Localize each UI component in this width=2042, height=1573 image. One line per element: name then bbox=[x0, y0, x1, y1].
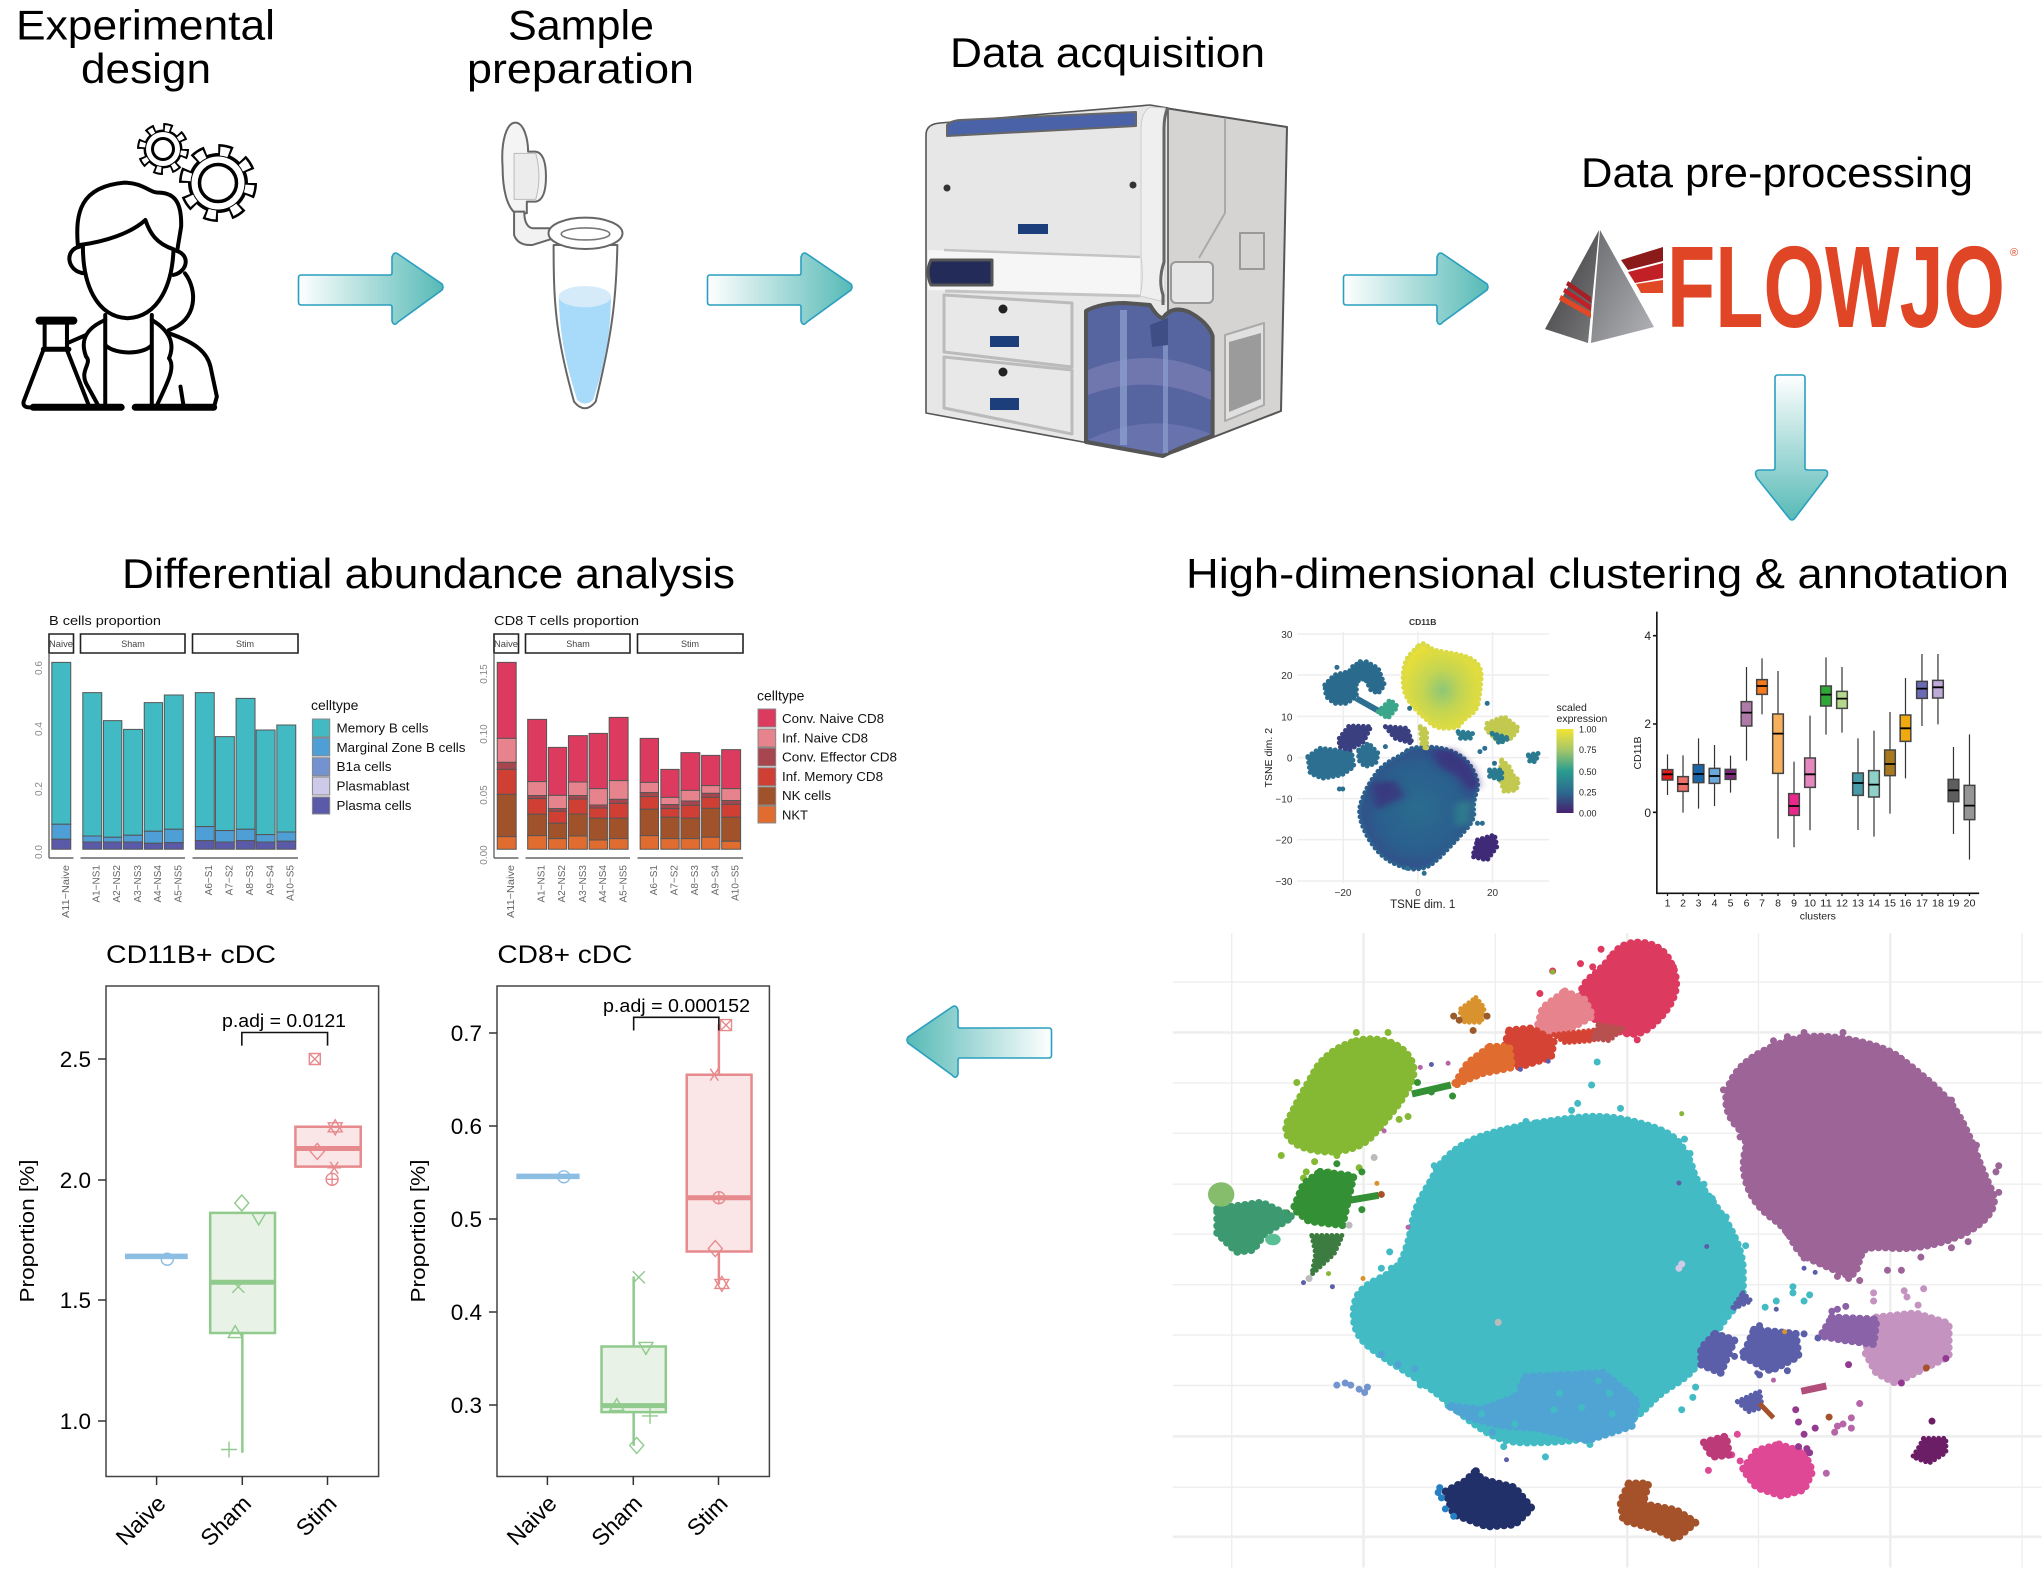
chart: CD11B feature tSNE: 20 bbox=[1281, 671, 1293, 682]
chart: CD11B feature tSNE: −20 bbox=[1275, 836, 1293, 846]
chart: CD11B boxplot by cluster: 5 bbox=[1728, 898, 1734, 910]
chart: CD11B+ cDC boxplot: 2.5 bbox=[60, 1047, 91, 1072]
chart: B cells proportion stacked bars: 0.6 bbox=[34, 661, 45, 675]
chart: CD11B+ cDC boxplot: Sham bbox=[195, 1490, 256, 1551]
chart: CD8 T cells proportion stacked bars: A8−S3 bbox=[690, 865, 701, 895]
chart: CD11B boxplot by cluster: 14 bbox=[1868, 898, 1880, 910]
chart: B cells proportion stacked bars: Plasmablast bbox=[336, 780, 410, 794]
chart: CD8+ cDC boxplot bbox=[407, 986, 769, 1551]
chart: CD11B boxplot by cluster: 18 bbox=[1932, 898, 1944, 910]
heading: CD11B+ cDC: CD11B+ cDC bbox=[106, 941, 276, 969]
chart: CD8+ cDC boxplot: 0.5 bbox=[451, 1207, 482, 1232]
heading: CD8+ cDC: CD8+ cDC bbox=[497, 941, 632, 969]
chart: CD11B boxplot by cluster: 12 bbox=[1836, 898, 1848, 910]
icon: flow cytometer instrument bbox=[926, 105, 1287, 456]
chart: CD8 T cells proportion stacked bars: NK cells bbox=[782, 789, 831, 803]
chart: B cells proportion stacked bars: A6−S1 bbox=[204, 865, 215, 895]
chart: B cells proportion stacked bars: Naive bbox=[49, 639, 73, 649]
chart: B cells proportion stacked bars: Stim bbox=[236, 639, 254, 649]
arrow: sample preparation to data acquisition bbox=[708, 253, 852, 324]
chart: B cells proportion stacked bars: B cells proportion bbox=[49, 613, 161, 628]
chart: CD11B boxplot by cluster: 7 bbox=[1759, 898, 1765, 910]
chart: CD11B feature tSNE: −10 bbox=[1275, 794, 1293, 806]
cluster: memory B cells teal bbox=[1354, 1062, 1810, 1457]
chart: CD11B boxplot by cluster: 0 bbox=[1644, 806, 1651, 820]
chart: CD11B feature tSNE: 1.00 bbox=[1579, 724, 1597, 734]
chart: B cells proportion stacked bars: 0.2 bbox=[34, 782, 45, 796]
arrow: pre-processing to clustering bbox=[1756, 375, 1828, 520]
chart: CD11B feature tSNE: −30 bbox=[1275, 877, 1293, 888]
chart: CD11B feature tSNE: 20 bbox=[1487, 888, 1498, 899]
chart: CD11B boxplot by cluster: 2 bbox=[1644, 717, 1651, 731]
chart: CD8 T cells proportion stacked bars: Naive bbox=[494, 639, 518, 649]
chart: B cells proportion stacked bars: 0.4 bbox=[34, 722, 45, 736]
title: high-dimensional clustering and annotation: High-dimensional clustering & annotation bbox=[1186, 550, 2009, 597]
chart: CD11B boxplot by cluster: 19 bbox=[1948, 898, 1960, 910]
chart: CD11B boxplot by cluster: 10 bbox=[1804, 898, 1816, 910]
chart: CD8+ cDC boxplot: Naive bbox=[502, 1490, 562, 1550]
chart: CD11B feature tSNE: 0.50 bbox=[1579, 767, 1597, 777]
chart: CD8 T cells proportion stacked bars: A5−NS5 bbox=[618, 865, 630, 903]
chart: CD11B feature tSNE: 0 bbox=[1415, 888, 1421, 899]
chart: CD11B+ cDC boxplot: Proportion [%] bbox=[16, 1160, 39, 1302]
chart: B cells proportion stacked bars: A3−NS3 bbox=[133, 865, 144, 903]
chart: CD11B+ cDC boxplot: Stim bbox=[291, 1490, 342, 1541]
chart: CD11B boxplot by cluster: clusters bbox=[1800, 910, 1836, 922]
chart: CD11B feature tSNE: expression bbox=[1556, 713, 1607, 725]
cluster: conv naive CD8 crimson bbox=[1540, 943, 1676, 1040]
chart: CD8+ cDC boxplot: Stim bbox=[682, 1490, 733, 1541]
chart: CD8 T cells proportion stacked bars: A6−S1 bbox=[649, 865, 660, 895]
chart: CD8 T cells proportion stacked bars bbox=[479, 613, 897, 918]
chart: B cells proportion stacked bars: A1−NS1 bbox=[92, 865, 102, 903]
cluster: cDC purple bbox=[1723, 1032, 1999, 1281]
chart: CD11B feature tSNE: −20 bbox=[1335, 888, 1352, 899]
chart: CD11B boxplot by cluster: 4 bbox=[1644, 629, 1651, 643]
chart: CD11B boxplot by cluster: 8 bbox=[1775, 898, 1781, 910]
chart: B cells proportion stacked bars: A2−NS2 bbox=[112, 865, 123, 903]
title: sample preparation: preparation bbox=[467, 45, 694, 92]
chart: CD11B feature tSNE: 30 bbox=[1281, 630, 1293, 641]
chart: CD11B feature tSNE: TSNE dim. 1 bbox=[1390, 899, 1455, 911]
chart: B cells proportion stacked bars: B1a cells bbox=[336, 760, 392, 774]
chart: CD11B boxplot by cluster: 1 bbox=[1665, 898, 1671, 910]
chart: CD11B boxplot by cluster: 13 bbox=[1852, 898, 1864, 910]
chart: B cells proportion stacked bars: Marginal Zone B cells bbox=[336, 741, 466, 755]
chart: CD8 T cells proportion stacked bars: NKT bbox=[782, 808, 808, 822]
chart: CD8 T cells proportion stacked bars: 0.15 bbox=[479, 664, 490, 684]
cluster: sea green bbox=[1217, 1203, 1292, 1252]
chart: CD8 T cells proportion stacked bars: celltype bbox=[757, 688, 805, 704]
cluster: periwinkle bbox=[1701, 1293, 1818, 1412]
chart: CD11B feature tSNE: 0 bbox=[1287, 754, 1293, 764]
chart: CD8+ cDC boxplot: 0.3 bbox=[451, 1393, 482, 1418]
cluster: lime green bbox=[1281, 1032, 1414, 1178]
title: differential abundance analysis: Differential abundance analysis bbox=[122, 550, 735, 597]
arrow: clustering to differential abundance bbox=[907, 1006, 1052, 1077]
cluster: inf memory CD8 red bbox=[1504, 1028, 1609, 1067]
chart: CD8 T cells proportion stacked bars: A7−S2 bbox=[670, 865, 680, 895]
chart: CD11B+ cDC boxplot: 1.0 bbox=[60, 1409, 91, 1434]
arrow: data acquisition to pre-processing bbox=[1344, 253, 1488, 324]
chart: CD11B boxplot by cluster: 2 bbox=[1680, 898, 1686, 910]
chart: CD11B boxplot by cluster: 9 bbox=[1791, 898, 1797, 910]
chart: CD8+ cDC boxplot: 0.7 bbox=[451, 1021, 482, 1046]
chart: CD8 T cells proportion stacked bars: Conv. Effector CD8 bbox=[782, 750, 897, 764]
chart: B cells proportion stacked bars: Sham bbox=[121, 639, 145, 649]
chart: CD11B feature tSNE: 10 bbox=[1281, 712, 1293, 724]
chart: CD8 T cells proportion stacked bars: Inf. Memory CD8 bbox=[782, 770, 883, 784]
chart: B cells proportion stacked bars: A8−S3 bbox=[245, 865, 256, 895]
chart: CD11B+ cDC boxplot: Naive bbox=[111, 1490, 171, 1550]
chart: CD11B feature tSNE: scaled bbox=[1556, 702, 1587, 714]
cluster: marginal zone B cells blue bbox=[1381, 1354, 1637, 1440]
chart: B cells proportion stacked bars: A9−S4 bbox=[266, 865, 276, 895]
chart: B cells proportion stacked bars: celltype bbox=[311, 697, 359, 713]
chart: CD11B boxplot by cluster: CD11B bbox=[1632, 736, 1644, 770]
chart: CD8 T cells proportion stacked bars: CD8 T cells proportion bbox=[494, 613, 639, 628]
cluster: dark purple bbox=[1913, 1421, 1946, 1463]
chart: CD8+ cDC boxplot: 0.6 bbox=[451, 1114, 482, 1139]
chart: CD8 T cells proportion stacked bars: Stim bbox=[681, 639, 699, 649]
chart: CD11B boxplot by cluster: 11 bbox=[1820, 898, 1832, 910]
chart: CD11B boxplot by cluster: 16 bbox=[1900, 898, 1912, 910]
chart: B cells proportion stacked bars: A5−NS5 bbox=[174, 865, 184, 903]
chart: CD8 T cells proportion stacked bars: A9−S4 bbox=[710, 865, 722, 895]
chart: CD8+ cDC boxplot: p.adj = 0.000152 bbox=[603, 996, 750, 1016]
chart: CD11B boxplot by cluster bbox=[1632, 612, 1979, 922]
chart: CD11B feature tSNE: 0.75 bbox=[1579, 745, 1597, 755]
chart: CD8 T cells proportion stacked bars: A11−Naive bbox=[506, 865, 517, 918]
chart: CD11B boxplot by cluster: 20 bbox=[1964, 898, 1976, 910]
arrow: design to sample preparation bbox=[298, 253, 443, 324]
chart: CD11B feature tSNE: 0.00 bbox=[1579, 808, 1597, 818]
chart: CD11B boxplot by cluster: 15 bbox=[1884, 898, 1896, 910]
title: data acquisition: Data acquisition bbox=[950, 29, 1265, 76]
chart: CD11B+ cDC boxplot: 2.0 bbox=[60, 1168, 91, 1193]
title: experimental design bbox=[16, 2, 275, 92]
chart: B cells proportion stacked bars: 0.0 bbox=[34, 845, 45, 859]
cluster: dark green bbox=[1287, 1083, 1453, 1225]
chart: CD11B feature tSNE: TSNE dim. 2 bbox=[1263, 728, 1275, 787]
chart: CD11B+ cDC boxplot: p.adj = 0.0121 bbox=[222, 1011, 346, 1031]
cluster: inf naive CD8 pink bbox=[1537, 992, 1593, 1035]
chart: B cells proportion stacked bars: A7−S2 bbox=[224, 865, 236, 895]
cluster: magenta bbox=[1704, 1436, 1729, 1457]
chart: CD11B+ cDC boxplot: 1.5 bbox=[60, 1288, 91, 1313]
chart: B cells proportion stacked bars: Plasma cells bbox=[336, 799, 412, 813]
chart: CD11B feature tSNE bbox=[1263, 617, 1607, 911]
chart: CD11B boxplot by cluster: 3 bbox=[1696, 898, 1702, 910]
icon: microcentrifuge tube bbox=[502, 123, 622, 408]
chart: CD8 T cells proportion stacked bars: Conv. Naive CD8 bbox=[782, 712, 884, 726]
chart: B cells proportion stacked bars: A10−S5 bbox=[286, 865, 296, 901]
chart: CD11B feature tSNE: 0.25 bbox=[1579, 788, 1597, 798]
title: sample preparation bbox=[467, 2, 694, 92]
chart: CD8 T cells proportion stacked bars: 0.05 bbox=[479, 785, 490, 805]
title: sample preparation: Sample bbox=[508, 2, 654, 48]
chart: CD8 T cells proportion stacked bars: A1−NS1 bbox=[536, 865, 548, 903]
cluster: brown bbox=[1621, 1484, 1696, 1539]
chart: B cells proportion stacked bars bbox=[34, 613, 466, 918]
chart: CD8 T cells proportion stacked bars: Sham bbox=[566, 639, 590, 649]
chart: CD11B boxplot by cluster: 6 bbox=[1744, 898, 1750, 910]
chart: CD8 T cells proportion stacked bars: Inf. Naive CD8 bbox=[782, 732, 868, 746]
chart: CD8+ cDC boxplot: Sham bbox=[586, 1490, 647, 1551]
chart: CD8 T cells proportion stacked bars: 0.00 bbox=[479, 845, 490, 865]
cluster: light mauve bbox=[1865, 1289, 1949, 1383]
chart: CD8+ cDC boxplot: 0.4 bbox=[451, 1300, 482, 1325]
chart: CD11B boxplot by cluster: 17 bbox=[1916, 898, 1928, 910]
chart: B cells proportion stacked bars: Memory B cells bbox=[336, 722, 428, 736]
chart: CD8 T cells proportion stacked bars: 0.10 bbox=[479, 724, 490, 744]
chart: CD8 T cells proportion stacked bars: A3−NS3 bbox=[578, 865, 589, 903]
cluster: scattered small populations bbox=[1303, 972, 1946, 1473]
title: experimental design: Experimental bbox=[16, 2, 275, 48]
chart: B cells proportion stacked bars: A11−Naive bbox=[61, 865, 72, 918]
chart: CD11B+ cDC boxplot bbox=[16, 986, 379, 1551]
icon: scientist with flask and gears bbox=[23, 128, 250, 408]
title: experimental design: design bbox=[81, 45, 211, 92]
chart: CD8 T cells proportion stacked bars: A4−NS4 bbox=[598, 865, 609, 903]
chart: annotated tSNE cell clusters bbox=[1173, 933, 2042, 1568]
chart: CD11B feature tSNE: CD11B bbox=[1409, 617, 1436, 627]
chart: CD8 T cells proportion stacked bars: A10−S5 bbox=[730, 865, 742, 901]
chart: CD8+ cDC boxplot: Proportion [%] bbox=[407, 1160, 430, 1302]
cluster: hot pink bbox=[1708, 1434, 1812, 1496]
chart: CD11B boxplot by cluster: 4 bbox=[1712, 898, 1718, 910]
chart: CD8 T cells proportion stacked bars: A2−NS2 bbox=[557, 865, 568, 903]
cluster: NKT orange bbox=[1454, 1047, 1512, 1086]
cluster: navy bbox=[1445, 1471, 1532, 1527]
title: data pre-processing: Data pre-processing bbox=[1581, 149, 1973, 196]
logo: FlowJo: ® bbox=[2010, 247, 2018, 259]
cluster: gold bbox=[1459, 998, 1484, 1022]
chart: B cells proportion stacked bars: A4−NS4 bbox=[153, 865, 164, 903]
